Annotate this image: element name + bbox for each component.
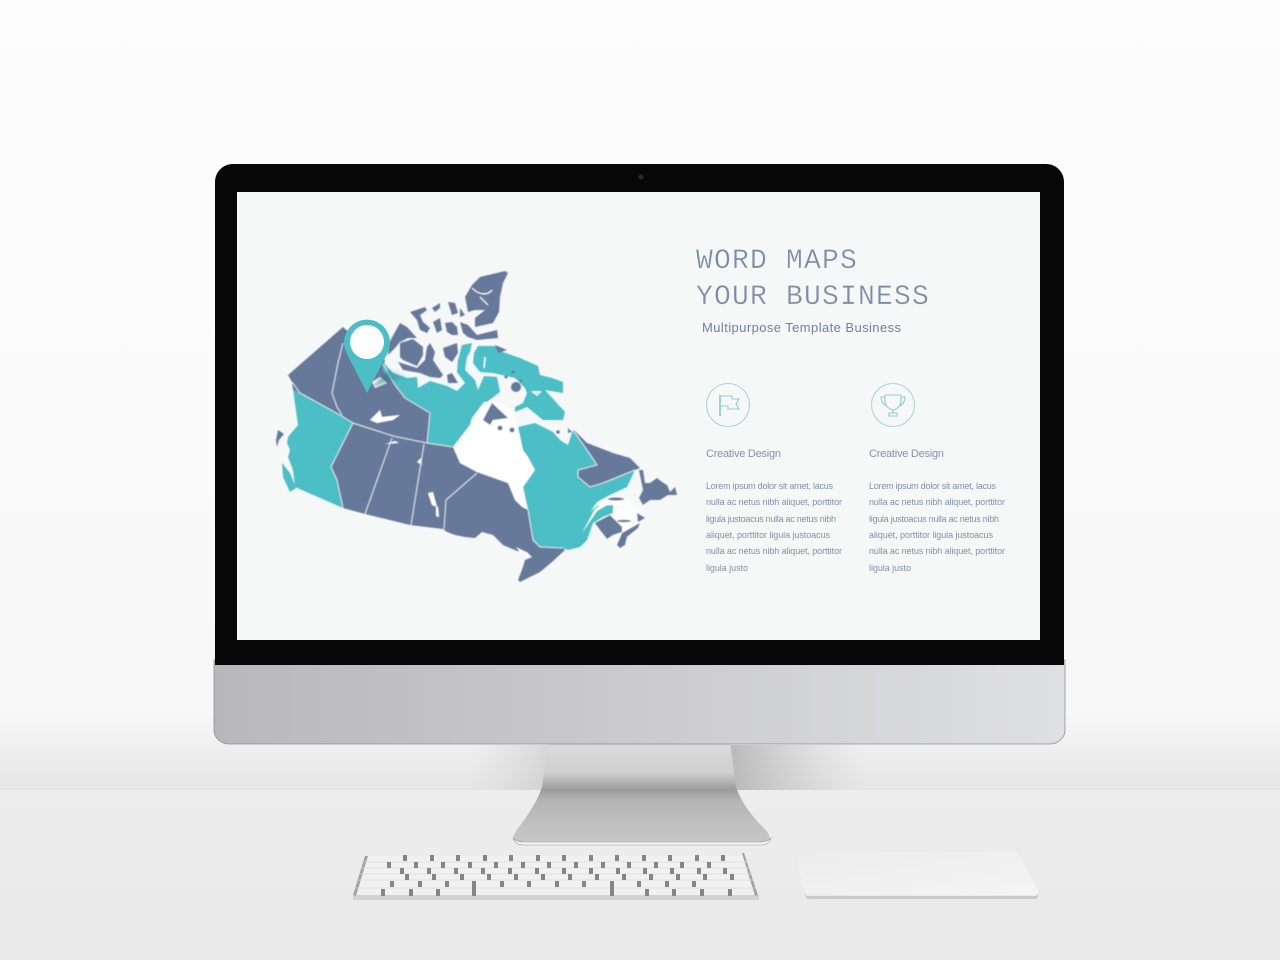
trackpad [797, 852, 1038, 899]
map pin [344, 320, 412, 393]
keyboard [353, 853, 759, 900]
Baffin inlets [484, 357, 540, 395]
column 1 body text: Lorem ipsum dolor sit amet, lacus [706, 481, 834, 491]
column 2 body text: Lorem ipsum dolor sit amet, lacus [869, 481, 996, 491]
St Lawrence river [582, 503, 609, 533]
column 2 heading: Creative Design [869, 448, 944, 460]
pin centre [350, 325, 384, 359]
Nunavut [383, 343, 500, 447]
white water [453, 398, 640, 540]
column 2 body text: ligula justo [869, 563, 911, 573]
icon: trophy [872, 384, 914, 426]
column 1 body text: ligula justo [706, 563, 748, 573]
British Columbia [287, 382, 353, 508]
Baffin Island [473, 346, 565, 420]
column 2 body text: nulla ac netus nibh aliquet, porttitor [869, 546, 1005, 556]
monitor [214, 164, 1065, 744]
lakes [370, 377, 530, 558]
desk surface [0, 790, 1280, 960]
title [696, 246, 930, 313]
column 1 body text: nulla ac netus nibh aliquet, porttitor [706, 546, 842, 556]
stand shadow on wall, left [470, 745, 550, 790]
webcam [638, 174, 644, 180]
slide screen [237, 192, 1040, 640]
map of Canada [276, 271, 677, 582]
column 2 body text: aliquet, porttitor ligula justoacus [869, 530, 994, 540]
monitor stand [513, 742, 771, 845]
Prince Edward Island [617, 520, 631, 522]
Vancouver Island [282, 463, 296, 492]
pin body [344, 320, 390, 393]
monitor bezel [215, 164, 1064, 665]
monitor chin [214, 660, 1065, 744]
Prairie provinces and Ontario [331, 423, 565, 582]
column 1 body text: ligula justoacus nulla ac netus nibh [706, 514, 836, 524]
column 2 body text: ligula justoacus nulla ac netus nibh [869, 514, 999, 524]
title: YOUR BUSINESS [696, 282, 930, 313]
Labrador [573, 429, 640, 487]
column 1 body text: aliquet, porttitor ligula justoacus [706, 530, 830, 540]
column 2 body text: nulla ac netus nibh aliquet, porttitor [869, 497, 1005, 507]
Quebec [518, 423, 635, 550]
Yukon and Northwest Territories [288, 327, 430, 443]
pin shadow [372, 370, 412, 387]
icon: flag [706, 384, 750, 426]
stand shadow on wall, right [730, 745, 865, 790]
Haida Gwaii [276, 430, 284, 447]
column 1 heading: Creative Design [706, 448, 781, 460]
title: WORD MAPS [696, 246, 858, 277]
Nova Scotia [617, 523, 640, 548]
province borders [292, 343, 635, 548]
Cape Breton [637, 513, 645, 522]
Arctic islands [388, 271, 572, 434]
Anticosti Island [608, 498, 624, 500]
subtitle: Multipurpose Template Business [702, 320, 902, 335]
Ellesmere inlets [472, 288, 492, 305]
New Brunswick [595, 515, 622, 539]
column 1 body text: nulla ac netus nibh aliquet, porttitor [706, 497, 842, 507]
Newfoundland [639, 470, 677, 505]
